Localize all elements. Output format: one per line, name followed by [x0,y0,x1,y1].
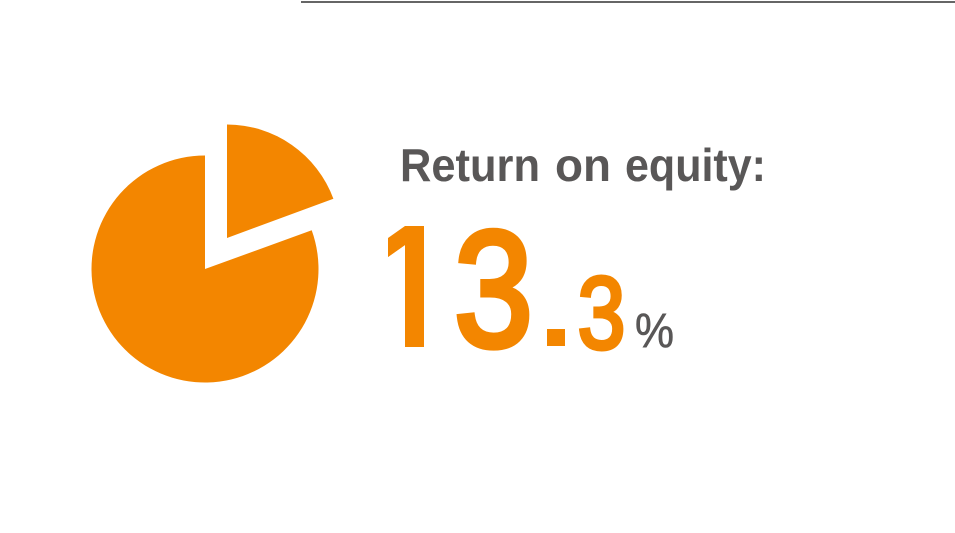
heading: return on equity: on [555,139,611,191]
heading: return on equity: Return [400,139,540,191]
icon: pie chart [92,124,333,383]
pie detached slice [227,124,333,238]
value: 13.3% [388,226,673,352]
pie main slice [92,156,319,383]
digit 3: 3 [454,197,533,381]
heading: return on equity [400,139,766,191]
digit 1 [388,226,424,347]
heading: return on equity: equity: [625,139,766,191]
decimal digit 3: 3 [578,256,626,370]
digit 1: 1 [375,192,451,384]
percent sign: % [635,305,674,358]
top rule [301,1,955,3]
decimal point [547,329,565,346]
